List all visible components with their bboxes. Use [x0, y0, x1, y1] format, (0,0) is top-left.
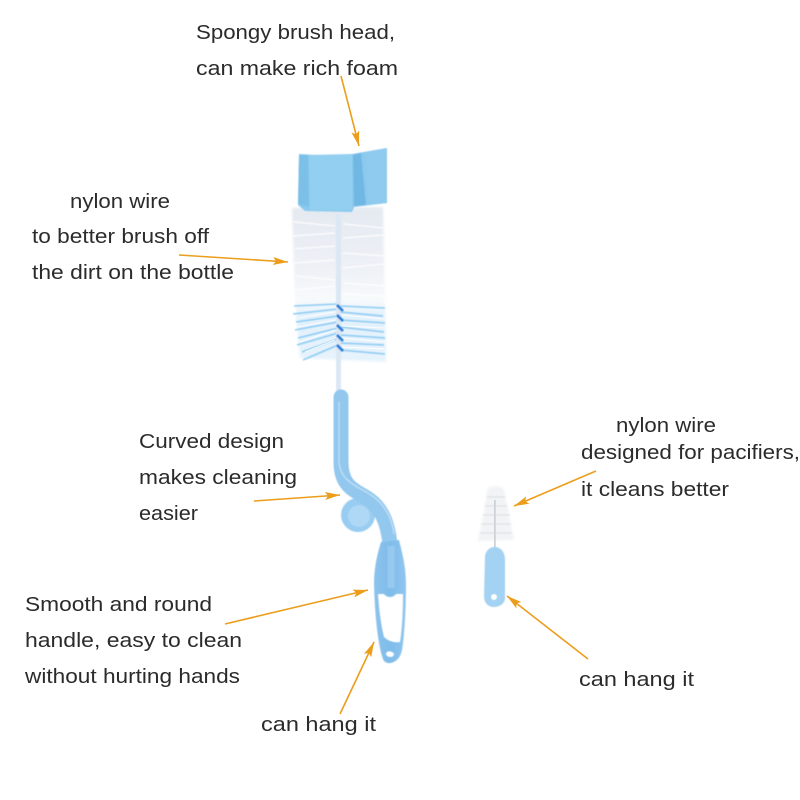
annotation: spongy brush head: Spongy brush head,: [196, 21, 395, 44]
pacifier brush handle: [484, 547, 505, 607]
sponge head: [298, 148, 387, 212]
annotation: can hang it, large brush: [261, 642, 376, 736]
annotation: can hang it, small brush: [507, 596, 694, 691]
annotation: can hang it, large brush: can hang it: [261, 713, 376, 736]
curved handle: [339, 397, 406, 663]
annotation: nylon wire pacifiers: nylon wire: [616, 414, 716, 437]
brush bristles: [292, 207, 386, 392]
annotation: curved design: Curved design: [139, 430, 284, 453]
annotation: nylon wire pacifiers: [514, 414, 800, 506]
large brush: [292, 148, 406, 663]
annotation: smooth handle: without hurting hands: [24, 665, 240, 688]
brush stem: [336, 214, 341, 392]
annotation: smooth handle: handle, easy to clean: [25, 629, 242, 652]
annotation: spongy brush head: [196, 21, 398, 146]
annotation: smooth handle: Smooth and round: [25, 593, 212, 616]
annotation: can hang it, small brush: can hang it: [579, 668, 694, 691]
annotation: nylon wire pacifiers: it cleans better: [581, 478, 729, 501]
annotation: smooth handle: [24, 590, 368, 688]
pacifier brush bristles: [478, 486, 514, 541]
annotation: nylon wire large brush: [32, 190, 288, 284]
annotation: nylon wire large brush: the dirt on the bottle: [32, 261, 234, 284]
small pacifier brush: [478, 486, 514, 607]
grip with hanging slot: [374, 540, 406, 663]
hanging disc: [341, 498, 375, 532]
annotation: nylon wire large brush: nylon wire: [70, 190, 170, 213]
annotation: nylon wire pacifiers: designed for pacifiers,: [581, 441, 800, 464]
annotation: nylon wire large brush: to better brush off: [32, 225, 209, 248]
annotation: curved design: [139, 430, 340, 525]
annotation: spongy brush head: can make rich foam: [196, 57, 398, 80]
annotation: curved design: easier: [139, 502, 198, 525]
annotation: curved design: makes cleaning: [139, 466, 297, 489]
